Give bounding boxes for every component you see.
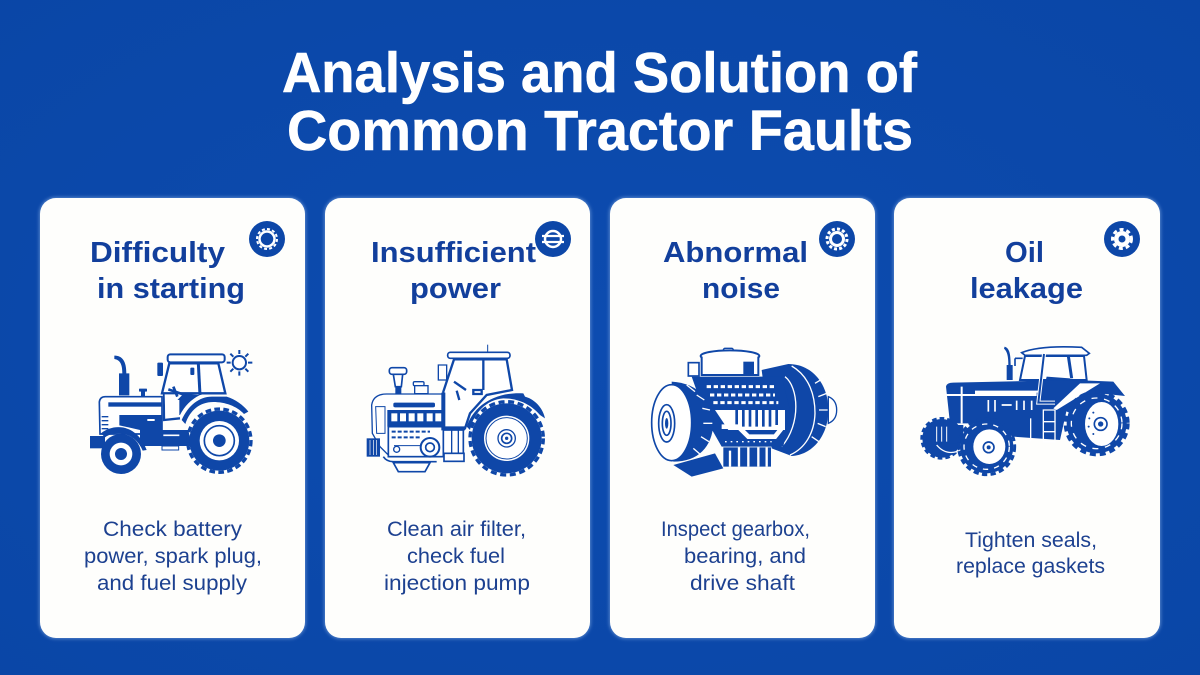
text: solution: [956, 529, 1105, 578]
heading: oil leakage: Oil: [1005, 237, 1044, 269]
text: solution: Check battery: [103, 518, 243, 541]
text: solution: [384, 518, 530, 595]
icon: piston badge: [535, 221, 571, 257]
heading: insufficient power: [371, 237, 536, 305]
text: solution: Inspect gearbox,: [661, 518, 810, 541]
title: Analysis and Solution of: [282, 41, 918, 105]
heading: abnormal noise: Abnormal: [663, 237, 808, 269]
text: solution: bearing, and: [684, 545, 806, 568]
icon: tractor with exposed engine: [367, 345, 545, 475]
icon: engine and gearbox: [652, 348, 837, 477]
text: solution: drive shaft: [690, 572, 795, 595]
heading: oil leakage: [970, 237, 1083, 305]
text: solution: Tighten seals,: [965, 529, 1097, 552]
text: solution: replace gaskets: [956, 555, 1105, 578]
icon: gear badge: [819, 221, 855, 257]
panel: abnormal noise: [609, 197, 876, 639]
heading: difficulty in starting: [90, 237, 245, 305]
icon: large tractor: [922, 347, 1128, 475]
panel: difficulty in starting: [39, 197, 306, 639]
panel: insufficient power: [324, 197, 591, 639]
icon: cog badge: [1104, 221, 1140, 257]
heading: insufficient power: power: [410, 273, 501, 305]
text: solution: [84, 518, 262, 595]
text: solution: check fuel: [407, 545, 505, 568]
text: solution: injection pump: [384, 572, 530, 595]
heading: abnormal noise: [663, 237, 808, 305]
text: solution: power, spark plug,: [84, 545, 262, 568]
title: [282, 41, 918, 163]
heading: insufficient power: Insufficient: [371, 237, 536, 269]
icon: gear badge: [249, 221, 285, 257]
title: Common Tractor Faults: [287, 99, 913, 163]
text: solution: [661, 518, 810, 595]
heading: oil leakage: leakage: [970, 273, 1083, 305]
text: solution: Clean air filter,: [387, 518, 526, 541]
text: solution: and fuel supply: [97, 572, 248, 595]
heading: difficulty in starting: in starting: [97, 273, 245, 305]
heading: difficulty in starting: Difficulty: [90, 237, 225, 269]
panel: oil leakage: [893, 197, 1161, 639]
heading: abnormal noise: noise: [702, 273, 780, 305]
icon: tractor with sun: [90, 350, 252, 474]
